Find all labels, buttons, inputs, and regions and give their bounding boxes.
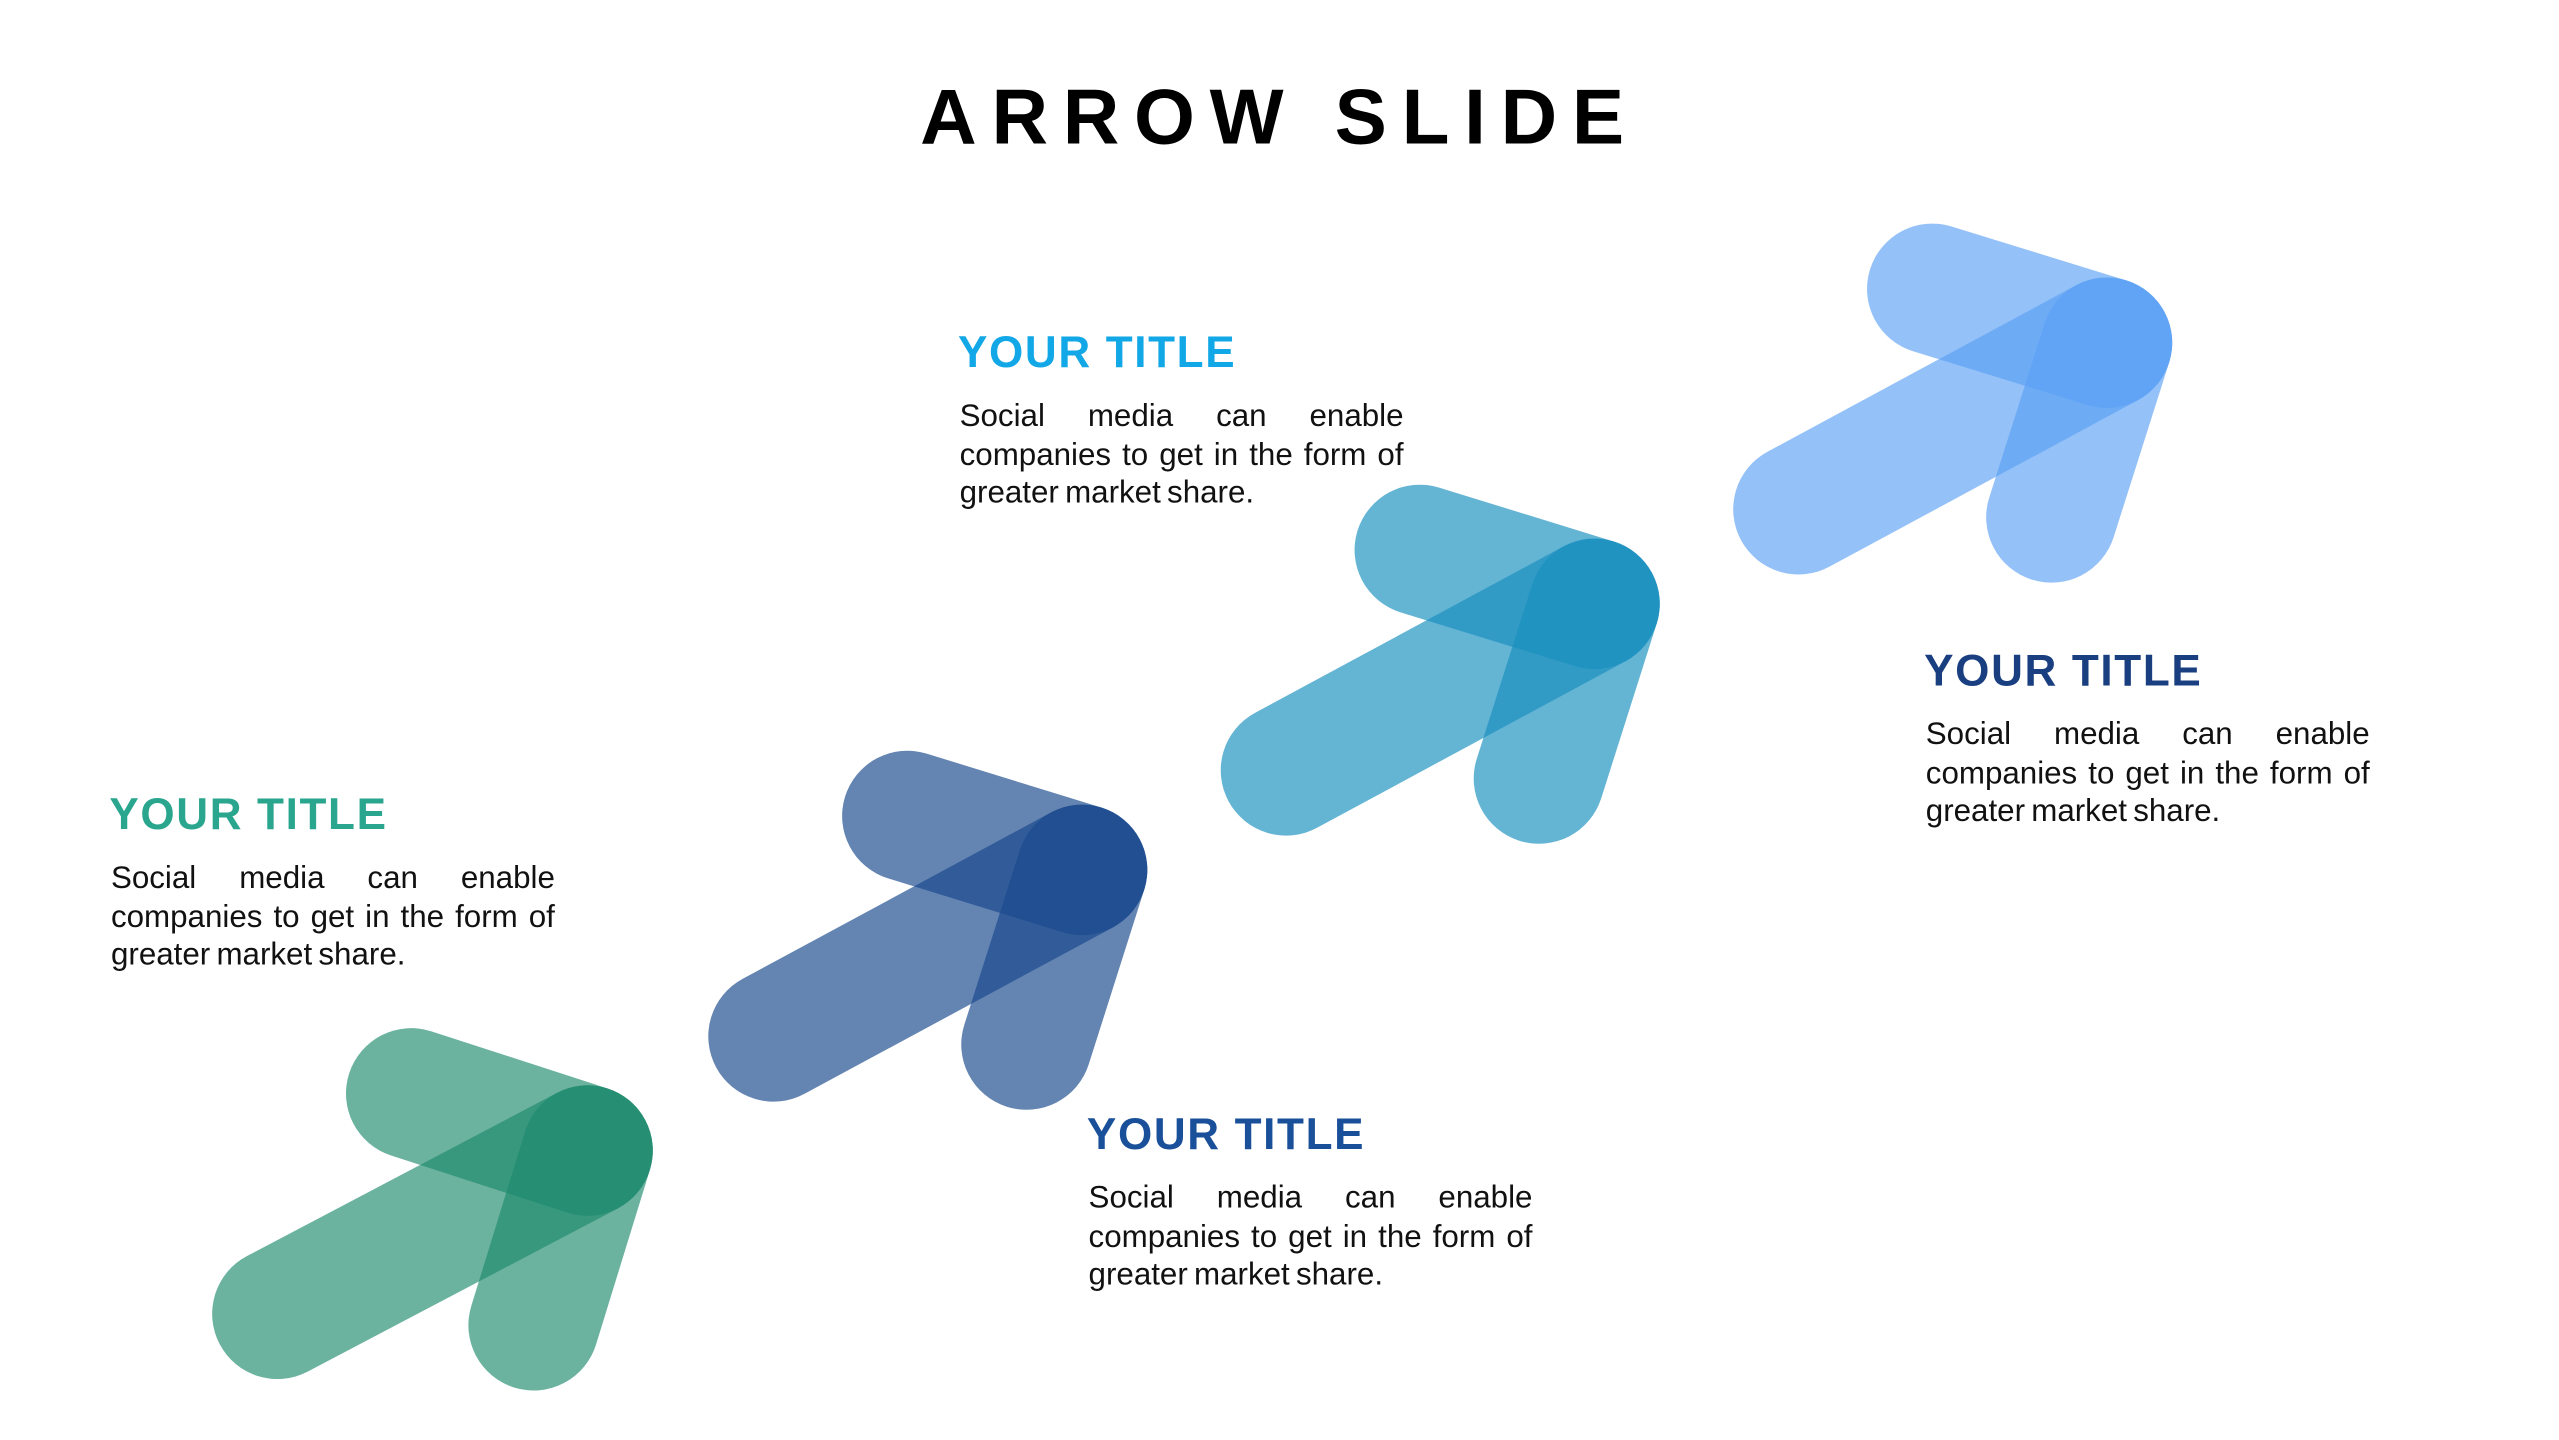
body: Social media can enable companies to get in the form of greater market share.	[960, 400, 1404, 511]
body: Social media can enable companies to get in the form of greater market share.	[111, 862, 555, 973]
heading: YOUR TITLE	[109, 790, 388, 839]
arrow: green	[277, 1093, 588, 1325]
arrow: navy	[774, 816, 1082, 1044]
arrow: light blue	[1798, 289, 2107, 517]
heading: YOUR TITLE	[1924, 646, 2202, 695]
text block: green	[109, 790, 555, 973]
text block: navy	[1087, 1110, 1532, 1293]
title: ARROW SLIDE	[920, 75, 1639, 162]
body: Social media can enable companies to get in the form of greater market share.	[1926, 718, 2370, 829]
heading: YOUR TITLE	[1087, 1110, 1365, 1159]
text block: dark navy	[1924, 646, 2370, 829]
arrow: teal	[1286, 550, 1594, 778]
heading: YOUR TITLE	[958, 328, 1236, 377]
body: Social media can enable companies to get in the form of greater market share.	[1089, 1182, 1532, 1293]
text block: cyan	[958, 328, 1404, 511]
